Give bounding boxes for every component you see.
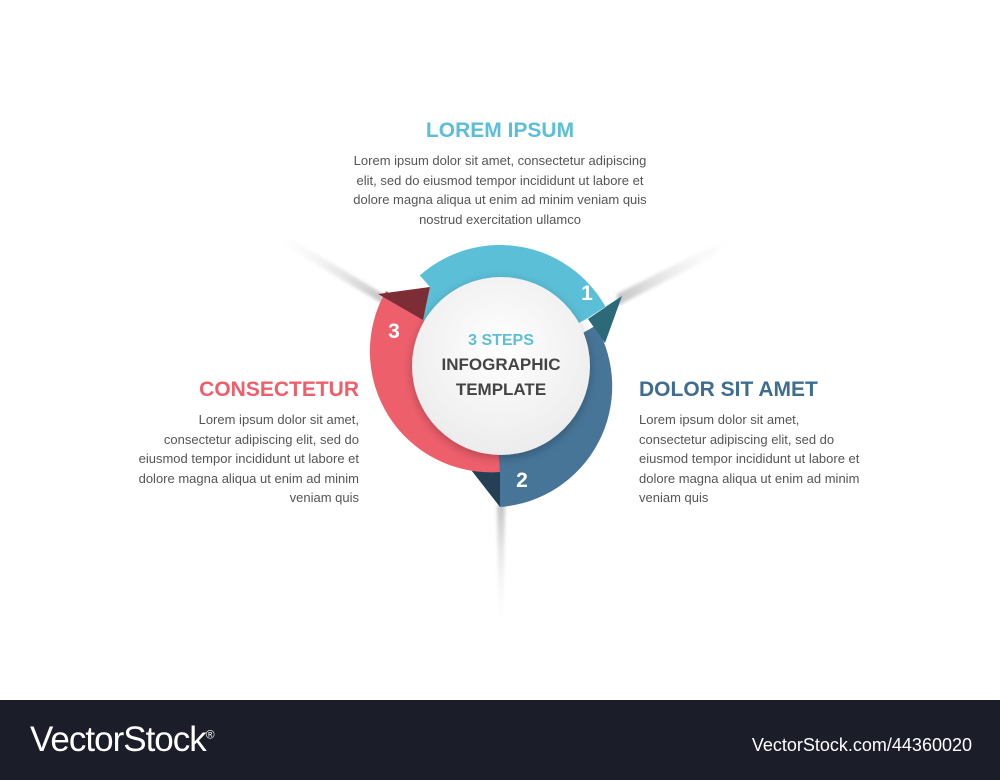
center circle: 3 STEPS	[468, 332, 534, 349]
heading: consectetur: CONSECTETUR	[199, 378, 359, 401]
heading: lorem ipsum: LOREM IPSUM	[426, 119, 574, 142]
text: right	[639, 412, 860, 505]
text: right: veniam quis	[639, 490, 708, 505]
text: left: dolore magna aliqua ut enim ad minim	[139, 470, 359, 486]
center circle: INFOGRAPHIC	[442, 355, 560, 374]
text: top: Lorem ipsum dolor sit amet, consectetur adipiscing	[354, 153, 646, 168]
center circle	[412, 277, 590, 455]
footer bar	[0, 700, 1000, 780]
text: right: consectetur adipiscing elit, sed do	[639, 432, 834, 446]
segment 3 red	[370, 291, 500, 472]
shadow lines	[268, 226, 742, 635]
text: right: Lorem ipsum dolor sit amet,	[639, 412, 799, 427]
text: top: dolore magna aliqua ut enim ad minim veniam quis	[353, 192, 647, 207]
segment 3 red: 3	[388, 320, 400, 343]
text: top: elit, sed do eiusmod tempor incididunt ut labore et	[357, 172, 643, 188]
text: left: eiusmod tempor incididunt ut labore et	[139, 451, 359, 466]
center circle: TEMPLATE	[456, 380, 546, 399]
segment 1 blue	[420, 245, 622, 366]
segment 1 blue: 1	[581, 282, 593, 305]
footer logo: VectorStock®	[30, 720, 214, 759]
text: right: dolore magna aliqua ut enim ad minim	[639, 470, 859, 486]
fold: red end	[378, 287, 430, 320]
text: top: nostrud exercitation ullamco	[419, 212, 581, 226]
text: left	[139, 412, 359, 505]
segment 2 dark blue	[468, 326, 612, 507]
text: left: veniam quis	[290, 490, 359, 505]
text: left: Lorem ipsum dolor sit amet,	[199, 412, 359, 427]
footer url: VectorStock.com/44360020	[752, 735, 972, 755]
segment 2 dark blue: 2	[516, 469, 528, 492]
heading: dolor sit amet: DOLOR SIT AMET	[639, 378, 818, 401]
text: left: consectetur adipiscing elit, sed do	[164, 432, 359, 446]
text: top	[353, 153, 647, 226]
text: right: eiusmod tempor incididunt ut labore et	[639, 451, 859, 466]
